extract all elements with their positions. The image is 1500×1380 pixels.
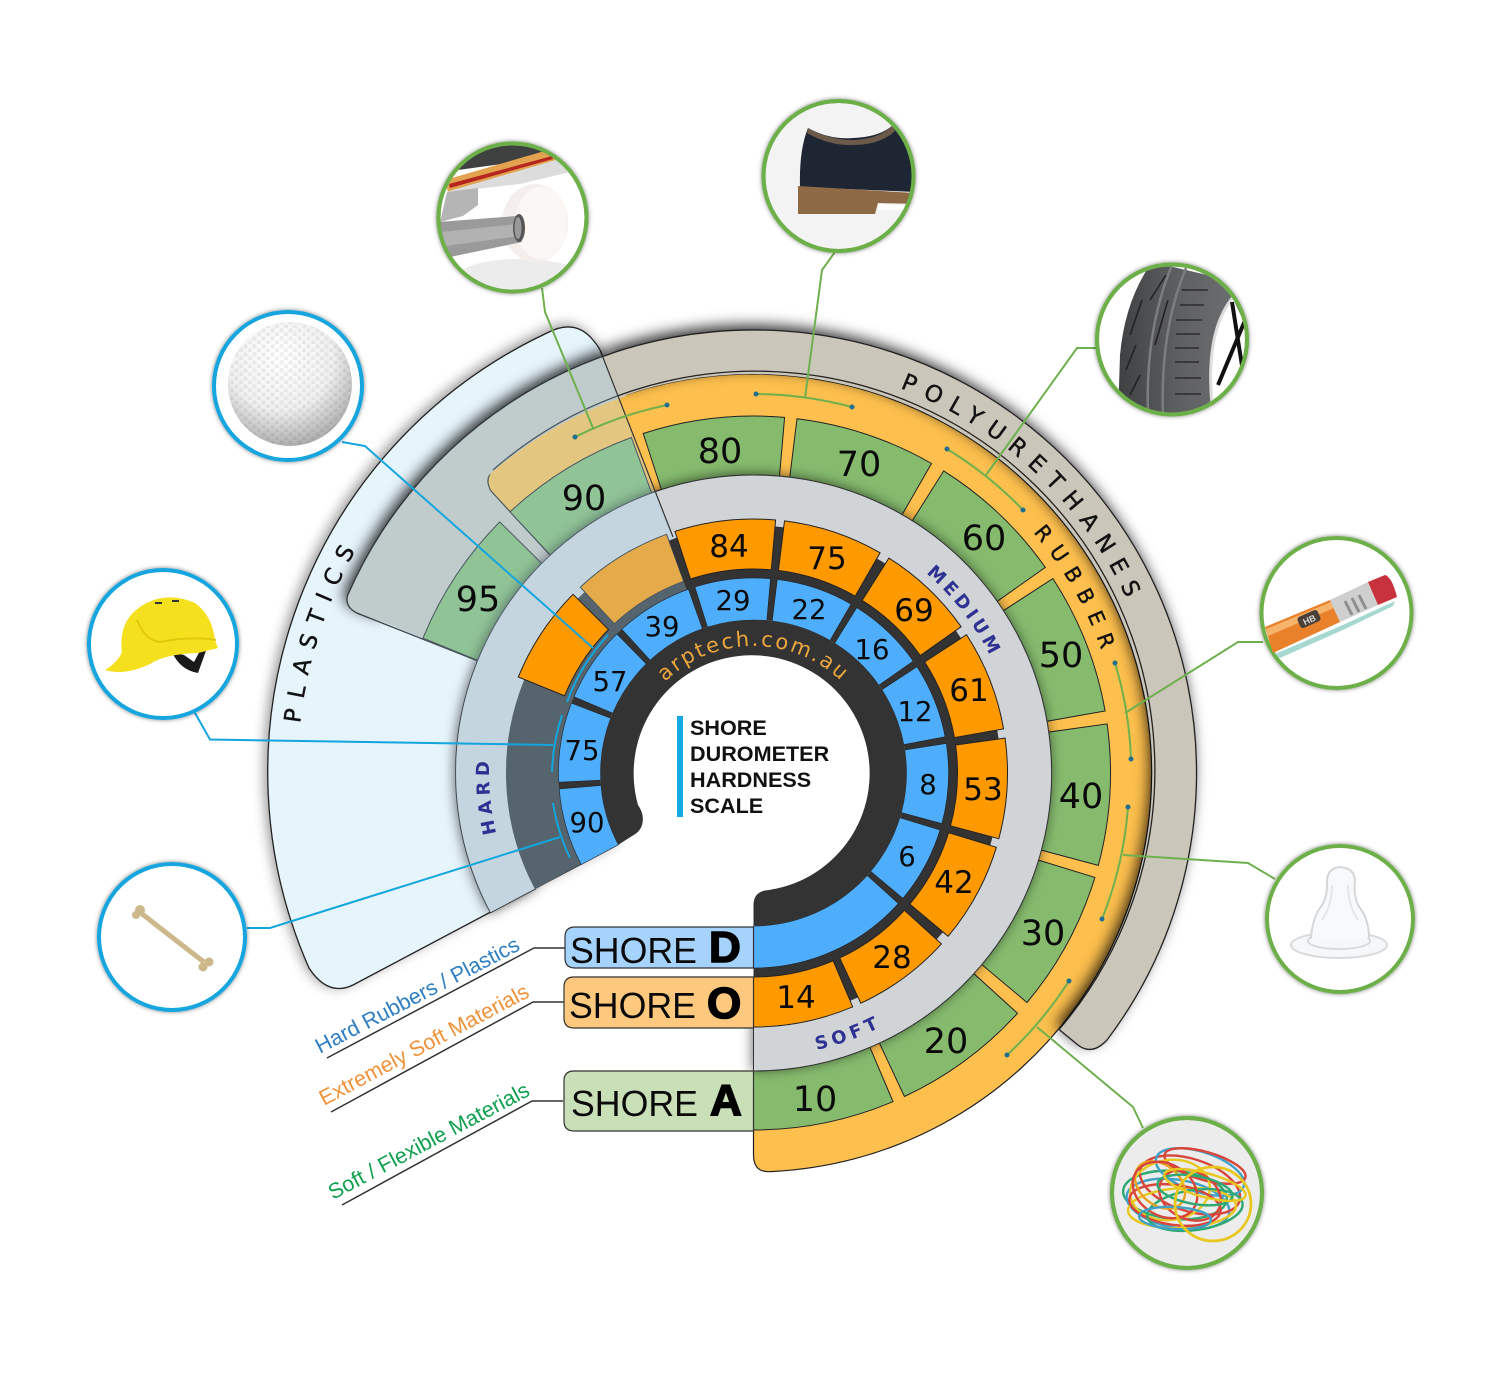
grey hardness ring: [456, 475, 1052, 1071]
shore D values: 29: [716, 585, 750, 617]
label: plastics: PLASTICS: [284, 544, 354, 722]
inner dark ring: [601, 620, 907, 926]
shore A values: 50: [1039, 636, 1083, 676]
icon: baby bottle nipple: [1267, 846, 1413, 992]
cell: A 10: [754, 1047, 893, 1130]
cell: O solid orange: [518, 594, 608, 696]
cell: D 6: [871, 818, 940, 898]
icon: rubber bands: [1112, 1118, 1262, 1268]
panel: polyurethanes left rim: [347, 354, 624, 622]
caption: extremely soft materials: Extremely Soft Materials: [315, 978, 533, 1110]
shore D values: 39: [644, 611, 680, 643]
shore A values: 95: [456, 580, 500, 620]
label: polyurethanes: POLYURETHANES: [902, 373, 1140, 596]
title: shore durometer hardness scale: SHORE: [690, 715, 767, 740]
cell: A 20: [879, 974, 1018, 1096]
cell: D 39: [622, 589, 702, 660]
shore A cells: [423, 416, 1110, 1130]
cell: O 53: [950, 738, 1007, 839]
icon: hard hat: [89, 570, 237, 718]
shore A values: 60: [962, 519, 1006, 559]
arrow: helmet leader: [195, 713, 562, 772]
icon: bone: [99, 864, 245, 1010]
cell: D 8: [901, 744, 949, 824]
shore A values: 30: [1021, 914, 1065, 954]
shore O cells: [518, 519, 1007, 1027]
leader: shore O: [331, 1002, 564, 1112]
tab: shore A: A: [710, 1076, 742, 1125]
arrow: skateboard leader: [542, 288, 670, 440]
tab: shore O: [564, 977, 754, 1028]
cell: O 42: [910, 833, 996, 936]
tab: shore D: SHORE: [570, 931, 697, 971]
label: medium: MEDIUM: [927, 564, 1000, 654]
shore D cells: [558, 578, 949, 968]
shore D values: 75: [564, 735, 600, 767]
shore O values: 42: [934, 865, 974, 901]
shore O values: 75: [807, 541, 847, 577]
tab: shore D: D: [709, 923, 741, 972]
icon: golf ball: [214, 312, 362, 460]
panel: plastics sector: [268, 327, 692, 989]
title accent bar: [677, 716, 683, 817]
shore A values: 20: [924, 1022, 968, 1062]
title: shore durometer hardness scale: HARDNESS: [690, 767, 811, 792]
shore D values: 16: [854, 634, 890, 666]
cell: A 50: [1003, 579, 1105, 721]
tab: shore D: [565, 923, 754, 972]
shore A values: 70: [837, 445, 881, 485]
cell: A 80: [643, 416, 785, 490]
cell: D 22: [772, 580, 851, 640]
icon: tire: [1097, 262, 1250, 420]
panel: polyurethanes band: [609, 330, 1197, 1049]
dark divider strip: [669, 538, 693, 590]
cell: A 95: [423, 522, 542, 660]
title: shore durometer hardness scale: DUROMETER: [690, 741, 830, 766]
plastics panel edge: [602, 355, 673, 537]
icon: pencil: [1262, 538, 1412, 688]
cell: D 90: [559, 786, 618, 865]
label: rubber: RUBBER: [1034, 524, 1114, 650]
cell: A 60: [912, 471, 1045, 601]
cell: O 75: [778, 521, 880, 596]
icon: shoe: [764, 101, 915, 251]
shore O values: 28: [872, 940, 912, 976]
cell: O 61: [925, 635, 1004, 738]
leader: shore A: [342, 1101, 563, 1205]
cell: O 84: [675, 519, 776, 579]
arrow: rubber bands leader: [1004, 978, 1143, 1128]
website text: arptech.com.au: arptech.com.au: [659, 630, 846, 680]
cell: O 28: [840, 910, 941, 1003]
cell: O 69: [862, 558, 961, 656]
arrow: tire leader: [944, 348, 1096, 512]
arrow: pencil leader: [1112, 642, 1263, 762]
shore O values: 53: [963, 772, 1003, 808]
cell: D 16: [835, 608, 913, 685]
cell: O 14: [754, 961, 853, 1027]
shore D values: 22: [792, 594, 826, 626]
shore D values: [564, 585, 937, 873]
polyurethanes outline: [347, 330, 1197, 1049]
arrow: bone leader: [247, 803, 570, 928]
tab: shore A: SHORE: [571, 1084, 698, 1124]
shore O values: 14: [776, 980, 816, 1016]
dark base ring: [506, 526, 1000, 1020]
shore O values: 84: [709, 529, 749, 565]
icon: skateboard wheel: [438, 144, 586, 292]
icon: pencil: HB: [1301, 612, 1318, 627]
shore D values: 57: [592, 666, 628, 698]
tab: shore A: [564, 1071, 754, 1131]
arrow: nipple leader: [1100, 804, 1275, 922]
cell: A 40: [1041, 724, 1110, 865]
shore A values: [456, 432, 1103, 1120]
cell: O pale segment: [580, 534, 684, 624]
shore D values: 12: [898, 696, 932, 728]
cell: A 90: [510, 438, 652, 555]
cell: D 12: [882, 667, 945, 745]
cell: D 57: [574, 634, 646, 713]
cell: D 29: [695, 578, 770, 627]
cell: D 75: [558, 703, 611, 782]
arrow: shoe leader: [754, 252, 854, 410]
cell: A 70: [790, 419, 932, 515]
panel: polyurethanes wedge: [384, 394, 661, 660]
shore O values: 61: [949, 673, 989, 709]
plastics translucent overlay: [347, 356, 692, 913]
panel: polyurethanes rim patch: [348, 354, 626, 622]
shore D values: 90: [570, 807, 604, 839]
tab: shore O: SHORE: [569, 986, 696, 1026]
label: hard: HARD: [476, 762, 496, 835]
shore A values: 10: [793, 1080, 837, 1120]
cell: A 30: [982, 860, 1095, 1002]
shore A values: 40: [1059, 777, 1103, 817]
title: shore durometer hardness scale: [677, 715, 835, 818]
panel: rubber band: [488, 374, 1152, 1172]
arrow: golf ball leader: [342, 442, 608, 702]
tab: shore O: O: [707, 979, 741, 1028]
shore D values: 6: [898, 841, 916, 873]
shore A values: 80: [698, 432, 742, 472]
shore D values: 8: [919, 769, 937, 801]
caption: hard rubbers / plastics: Hard Rubbers / Plastics: [311, 931, 524, 1058]
shore A values: 90: [562, 479, 606, 519]
cell: D bottom blue: [754, 875, 898, 968]
leader: shore D: [327, 948, 565, 1058]
shore O values: [709, 529, 1003, 1016]
label: soft: SOFT: [816, 1016, 875, 1049]
caption: soft / flexible materials: Soft / Flexible Materials: [324, 1077, 534, 1204]
shore O values: 69: [894, 593, 934, 629]
title: shore durometer hardness scale: SCALE: [690, 793, 763, 818]
